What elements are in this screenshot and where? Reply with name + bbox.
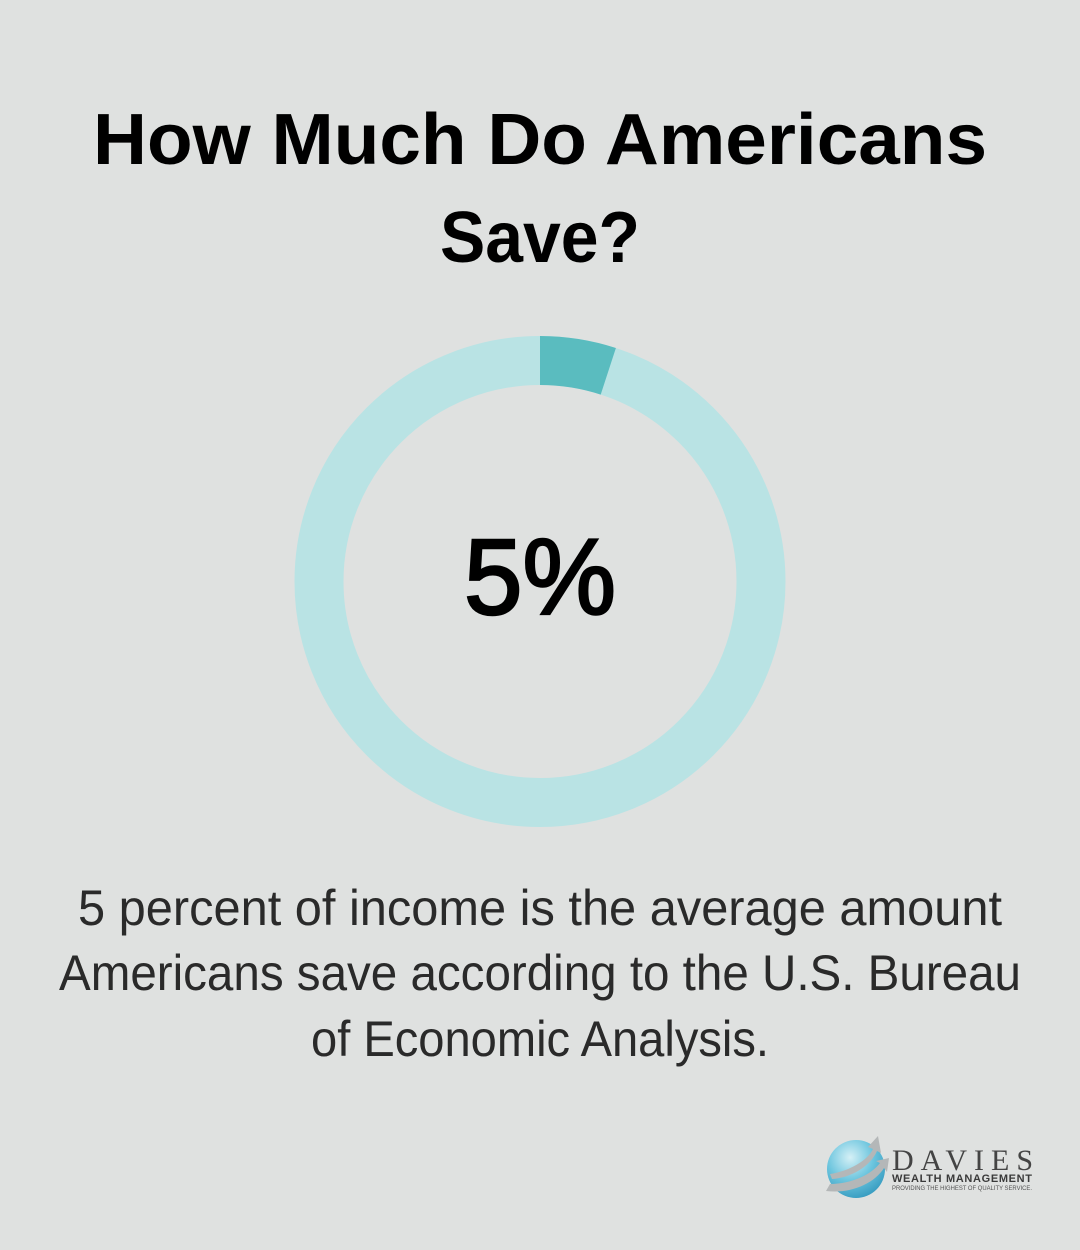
title: How Much Do Americans xyxy=(93,100,987,180)
donut track xyxy=(319,360,761,802)
logo: Davies Wealth Management xyxy=(826,1136,1033,1198)
description text: 5 percent of income is the average amount xyxy=(78,880,1002,936)
donut segment: 5 percent xyxy=(540,336,616,395)
icon: lower swoosh arrow xyxy=(826,1158,889,1192)
icon: upper swoosh arrow xyxy=(830,1136,881,1179)
description text: Americans save according to the U.S. Bureau xyxy=(59,945,1021,1001)
description text xyxy=(59,880,1021,1067)
logo tagline: PROVIDING THE HIGHEST OF QUALITY SERVICE. xyxy=(892,1185,1032,1192)
title xyxy=(93,100,987,278)
icon: globe xyxy=(827,1140,885,1198)
logo name: DAVIES xyxy=(892,1144,1033,1177)
donut chart xyxy=(319,336,761,802)
description text: of Economic Analysis. xyxy=(311,1011,769,1067)
donut value: 5% xyxy=(464,516,616,637)
title: Save? xyxy=(440,198,640,278)
logo subtitle: WEALTH MANAGEMENT xyxy=(892,1173,1032,1185)
